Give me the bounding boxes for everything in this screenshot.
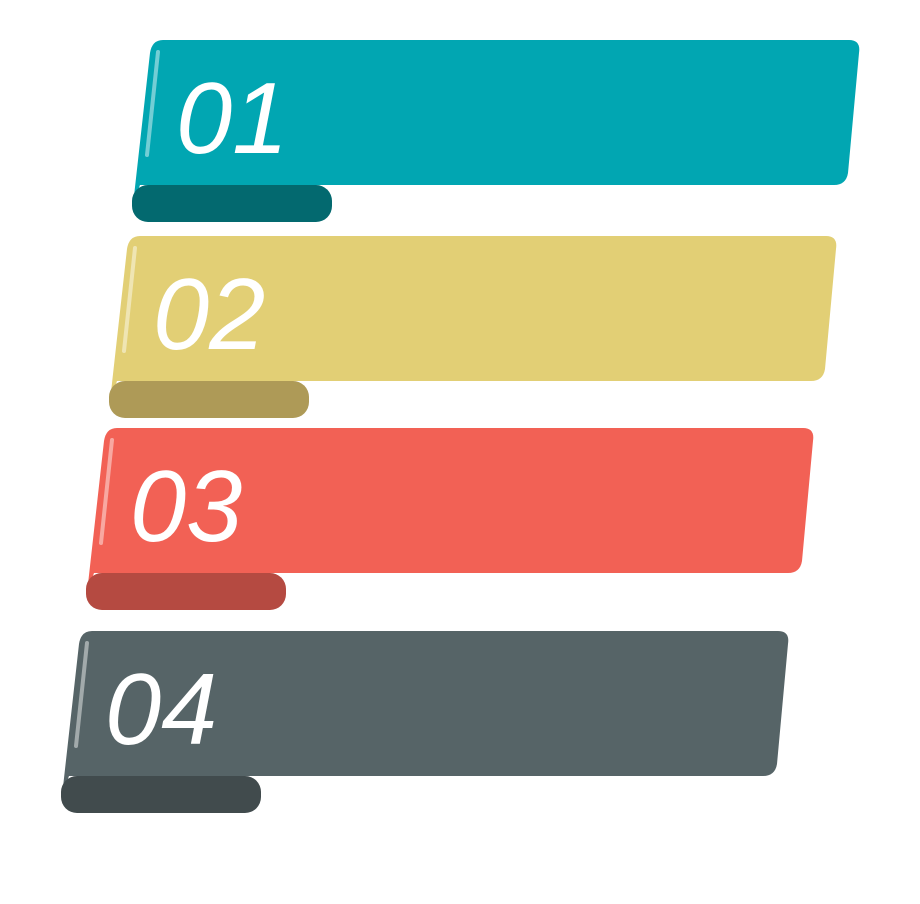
banner 01 xyxy=(132,40,859,222)
label 02: 02 xyxy=(153,259,265,371)
tab 04 xyxy=(61,776,261,813)
banner 03 xyxy=(86,428,813,610)
label 03: 03 xyxy=(130,451,242,563)
tab 03 xyxy=(86,573,286,610)
tab 02 xyxy=(109,381,309,418)
label 04: 04 xyxy=(105,654,217,766)
label 01: 01 xyxy=(176,63,288,175)
banner 02 xyxy=(109,236,836,418)
tab 01 xyxy=(132,185,332,222)
banner 04 xyxy=(61,631,788,813)
